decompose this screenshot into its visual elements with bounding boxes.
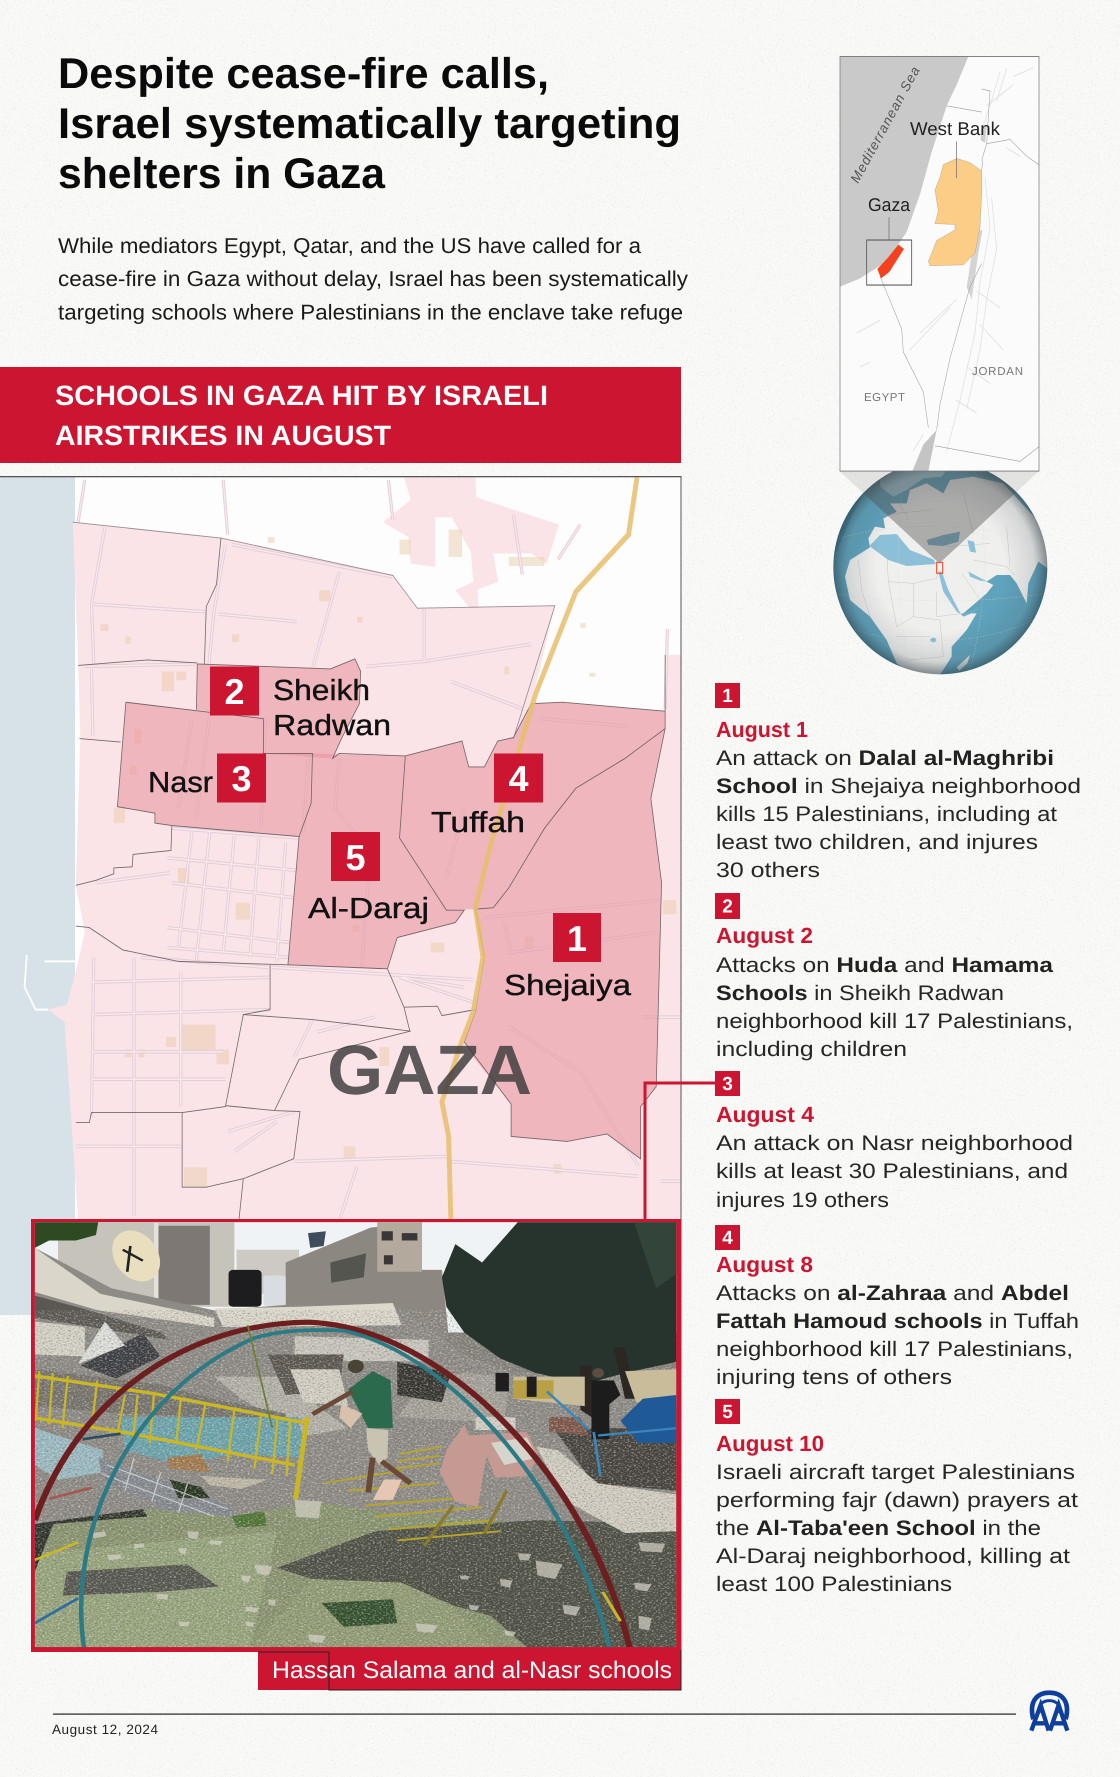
map marker 4: Tuffah: Tuffah (431, 807, 525, 839)
red section banner: AIRSTRIKES IN AUGUST (55, 420, 391, 451)
foliage top-left (35, 1222, 98, 1248)
map marker 2: Sheikh Radwan: Sheikh (273, 675, 370, 707)
event 1: August 1: An attack on Dalal al-Maghribi (716, 747, 1054, 770)
swing arch inner blue (81, 1330, 609, 1647)
title (58, 50, 681, 198)
northern seas (880, 470, 947, 497)
photo base (35, 1222, 676, 1647)
left building (58, 1222, 234, 1307)
satellite dish (103, 1224, 169, 1287)
event 5: August 10: Israeli aircraft target Palestinians (716, 1461, 1075, 1484)
map marker 3: Nasr: 3 (231, 758, 252, 799)
event 2: August 2: August 2 (716, 923, 813, 948)
fallen yellow grate (324, 1447, 507, 1546)
borders (880, 89, 1039, 461)
event 4: August 8: Fattah Hamoud schools in Tuffah (716, 1310, 1079, 1333)
inset map labels: Gaza (868, 194, 911, 215)
inset map labels: EGYPT (864, 392, 905, 404)
event 5: August 10: least 100 Palestinians (716, 1573, 952, 1596)
ground (35, 1502, 676, 1647)
inset map labels: JORDAN (972, 366, 1023, 378)
man walking (312, 1360, 411, 1500)
intro text: While mediators Egypt, Qatar, and the US have called for a (58, 234, 641, 258)
country borders (858, 493, 1015, 660)
event 4: August 8 (715, 1225, 1079, 1389)
map marker 2: Sheikh Radwan: 2 (224, 671, 245, 712)
Red Sea (938, 572, 961, 614)
event 1: August 1: August 1 (716, 717, 808, 742)
men at back (591, 1380, 620, 1439)
tree (442, 1222, 676, 1384)
mid pink target neighborhoods (117, 659, 665, 1159)
Gaza Strip (877, 245, 904, 278)
photo caption: Hassan Salama and al-Nasr schools (272, 1657, 672, 1684)
Dead Sea and Gulf of Aqaba (967, 230, 983, 299)
inset map labels (847, 64, 1023, 404)
event 3: August 4: injures 19 others (716, 1189, 889, 1212)
Mediterranean (869, 534, 936, 566)
yellow fence (35, 1376, 307, 1500)
title: shelters in Gaza (58, 150, 386, 198)
sky (35, 1222, 676, 1332)
event 1: August 1 (715, 683, 1081, 882)
swing arch outer red (35, 1322, 629, 1647)
footer rule (53, 1714, 1016, 1715)
torn fabric (440, 1424, 538, 1507)
street grid (double-line casing) (76, 480, 681, 1221)
event 5: August 10: performing fajr (dawn) prayers at (716, 1489, 1078, 1512)
blue wall and fallen fence (121, 1417, 304, 1465)
event 2: August 2: Schools in Sheikh Radwan (716, 982, 1004, 1005)
dark neighborhood boundaries (73, 522, 665, 1221)
blue slide (620, 1395, 676, 1443)
event 2: August 2: 2 (722, 896, 733, 918)
map marker 2: Sheikh Radwan (210, 666, 391, 742)
event 4: August 8: neighborhood kill 17 Palestinians, (716, 1338, 1073, 1361)
event 3: August 4: kills at least 30 Palestinians, and (716, 1160, 1068, 1183)
event 5: August 10: Al-Daraj neighborhood, killing at (716, 1545, 1070, 1568)
event 4: August 8: August 8 (716, 1252, 813, 1277)
funnel inside globe (864, 472, 1016, 564)
event 1: August 1: 1 (722, 686, 733, 707)
neighborhood map of Gaza City (0, 476, 682, 1690)
event 3: August 4: 3 (722, 1074, 733, 1095)
map marker 2: Sheikh Radwan: Radwan (273, 710, 391, 742)
event 5: August 10 (715, 1399, 1078, 1596)
map marker 5: Al-Daraj (308, 832, 429, 925)
event 3: August 4: An attack on Nasr neighborhood (716, 1132, 1073, 1155)
event 1: August 1: School in Shejaiya neighborhood (716, 775, 1081, 798)
locator box (937, 562, 943, 573)
inset map labels: West Bank (910, 118, 1001, 139)
lakes (930, 638, 936, 642)
Salah al-Din road (442, 477, 637, 1221)
map marker 1: Shejaiya: Shejaiya (504, 970, 632, 1002)
event 2: August 2: including children (716, 1038, 907, 1061)
event 5: August 10: the Al-Taba'een School in the (716, 1517, 1041, 1540)
map marker 1: Shejaiya (504, 913, 632, 1002)
Black Sea and Caspian (927, 532, 960, 546)
funnel outside globe (840, 472, 1038, 563)
back wall (513, 1369, 676, 1406)
event 4: August 8: Attacks on al-Zahraa and Abdel (716, 1282, 1069, 1305)
Mediterranean (840, 57, 968, 287)
title: Israel systematically targeting (58, 100, 681, 148)
icon: agency logo (1031, 1693, 1067, 1731)
event 1: August 1: 30 others (716, 859, 820, 882)
Madagascar (957, 655, 970, 671)
intro text: cease-fire in Gaza without delay, Israel has been systematically (58, 267, 688, 291)
event 5: August 10: August 10 (716, 1431, 824, 1456)
map marker 4: Tuffah (431, 754, 543, 839)
rocks on the ground (92, 1500, 665, 1643)
debris texture (35, 1310, 676, 1647)
deep Atlantic edge (834, 492, 864, 558)
event 3: August 4: August 4 (716, 1102, 815, 1127)
photo frame (31, 1219, 681, 1652)
event 4: August 8: injuring tens of others (716, 1366, 952, 1389)
event 1: August 1: least two children, and injures (716, 831, 1038, 854)
event 2: August 2 (715, 893, 1073, 1061)
rubble base (35, 1248, 676, 1531)
rungs (35, 1325, 620, 1623)
location inset map (840, 57, 1039, 471)
map marker 3: Nasr: Nasr (148, 767, 213, 799)
pale building blocks (100, 530, 676, 1187)
date: August 12, 2024 (52, 1722, 158, 1737)
photo caption (258, 1648, 681, 1690)
red section banner (0, 367, 681, 463)
event 2: August 2: neighborhood kill 17 Palestinians, (716, 1010, 1073, 1033)
land (845, 477, 1050, 680)
map marker 5: Al-Daraj: 5 (345, 837, 366, 878)
map marker 3: Nasr (148, 754, 266, 802)
terrain shading (857, 68, 1033, 451)
intro text (58, 234, 688, 324)
graticule (833, 463, 1047, 670)
event 3: August 4 (715, 1071, 1073, 1212)
light pink districts (48, 477, 681, 1221)
inset map labels: Mediterranean Sea (847, 64, 923, 185)
wrecked right side (554, 1428, 676, 1491)
Persian Gulf (968, 572, 987, 582)
map marker 4: Tuffah: 4 (508, 758, 529, 799)
event 1: August 1: kills 15 Palestinians, including at (716, 803, 1057, 826)
globe (833, 472, 1048, 674)
title: Despite cease-fire calls, (58, 50, 549, 98)
event 2: August 2: Attacks on Huda and Hamama (716, 954, 1053, 977)
event 4: August 8: 4 (722, 1228, 733, 1249)
red section banner: SCHOOLS IN GAZA HIT BY ISRAELI (55, 380, 548, 411)
white breakwater lines (25, 955, 76, 1010)
leader lines (889, 142, 957, 240)
fallen metal grate (103, 1458, 228, 1516)
photograph of destroyed school (35, 1222, 676, 1647)
West Bank (928, 158, 982, 266)
connector from marker 3 to photo (645, 1083, 716, 1219)
water tanks (229, 1270, 262, 1307)
map marker 1: Shejaiya: 1 (567, 918, 587, 959)
Gulf of Aden (960, 609, 978, 617)
map marker 5: Al-Daraj: Al-Daraj (308, 893, 429, 925)
event 5: August 10: 5 (722, 1402, 733, 1423)
background buildings (237, 1250, 299, 1294)
intro text: targeting schools where Palestinians in the enclave take refuge (58, 300, 683, 324)
map label: GAZA: GAZA (327, 1031, 532, 1109)
